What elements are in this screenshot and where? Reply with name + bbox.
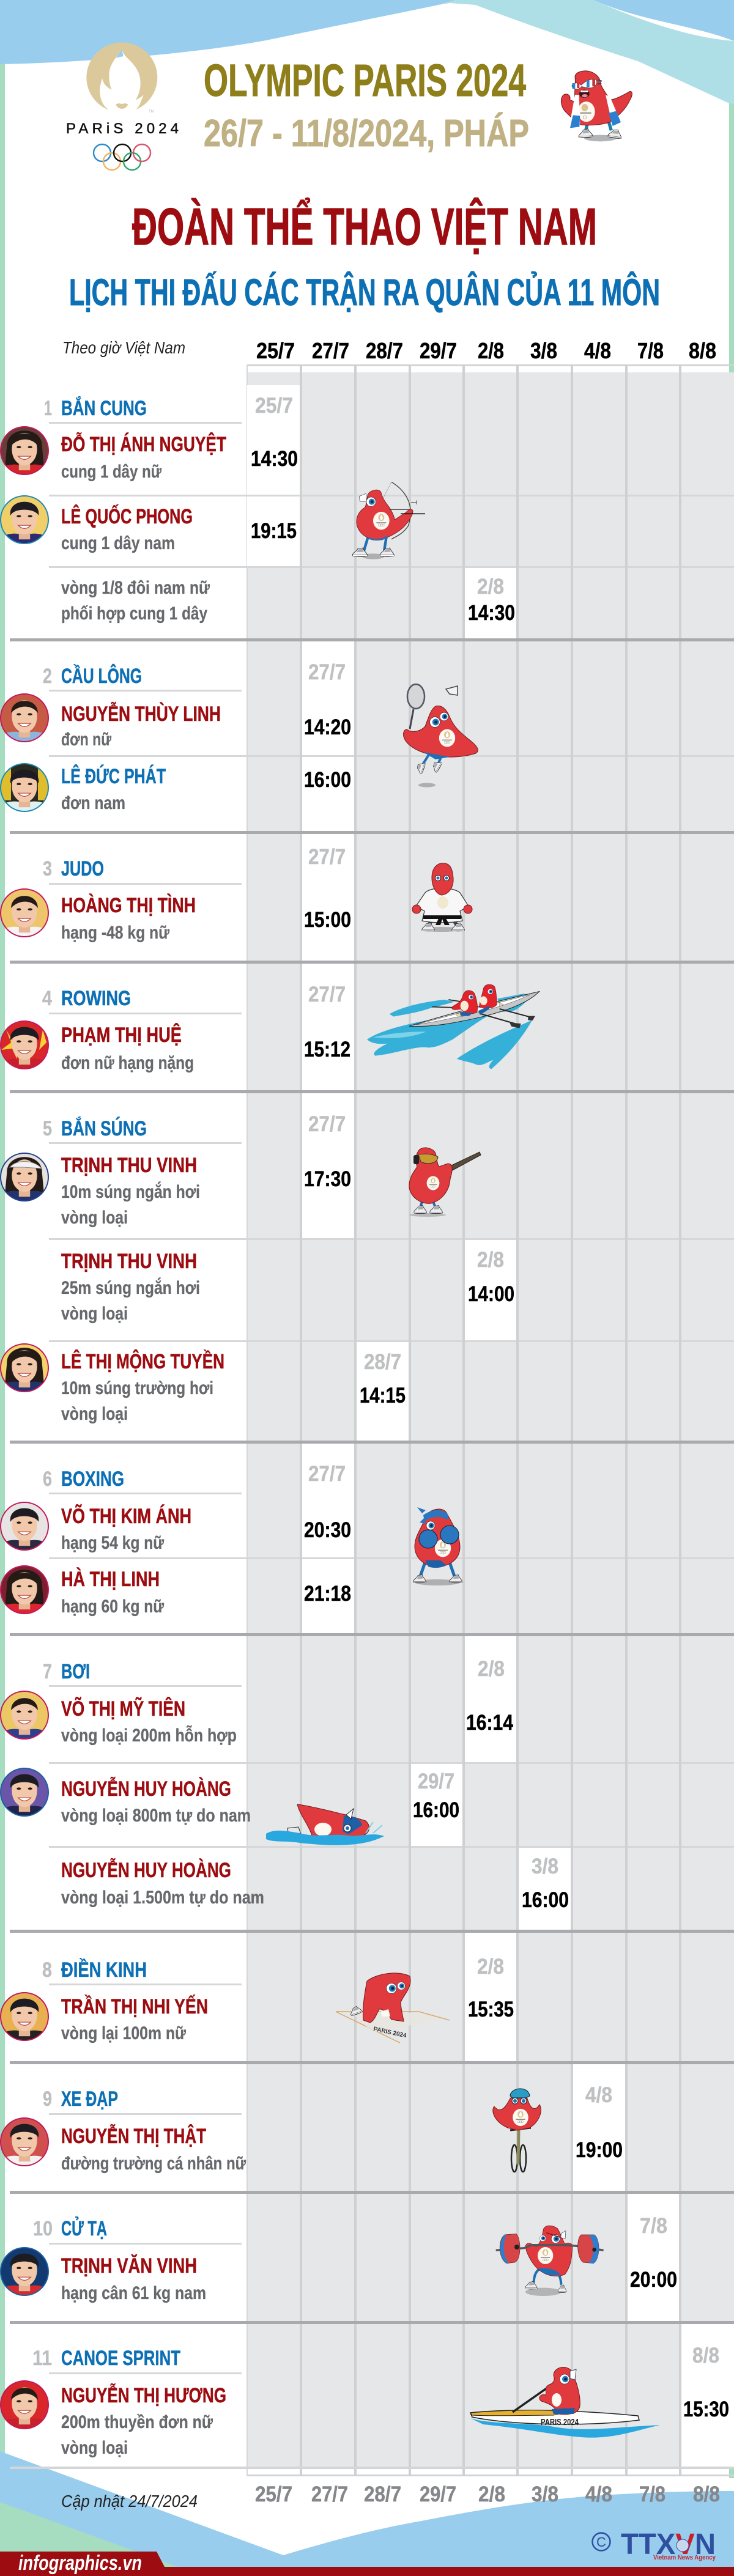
athlete name: TRỊNH VĂN VINH [61,2254,197,2278]
panel: 4 Rowing [0,983,350,1073]
time: 15:35 [468,1998,514,2021]
event: cung 1 dây nam [61,533,175,553]
athlete photo [0,2381,50,2430]
logo: TTXVN: TTXVN [621,2528,716,2561]
date header row [256,338,716,363]
sport heading [43,2087,118,2111]
time: 16:00 [522,1888,569,1912]
event: vòng loại [61,1404,128,1424]
event: vòng loại [61,1208,128,1228]
logo: TTXVN: C [596,2534,606,2550]
date footer row: 2/8 [478,2482,505,2506]
sport heading [43,1467,124,1491]
athlete photo [0,694,50,744]
time: 17:30 [304,1167,351,1191]
time: 21:18 [304,1582,351,1606]
athlete photo [0,427,50,476]
date footer row: 27/7 [311,2482,348,2506]
athlete photo [0,1021,50,1071]
icon: mascot with scarf [561,71,632,141]
icon: mascot canoe: PARIS 2024 [541,2417,579,2427]
date: 8/8 [692,2344,719,2367]
panel: 1 Bắn cung [0,394,515,625]
date header row: 28/7 [366,338,403,363]
event: đơn nam [61,793,125,813]
time: 14:30 [468,601,515,625]
icon: mascot badminton [404,684,478,788]
date header row: 2/8 [478,338,504,363]
sport heading: XE ĐẠP [61,2087,118,2111]
athlete name: ĐỖ THỊ ÁNH NGUYỆT [61,433,226,456]
date footer row: 8/8 [693,2482,720,2506]
event: 25m súng ngắn hơi [61,1277,200,1298]
event: đơn nữ hạng nặng [61,1053,194,1073]
date footer row: 4/8 [585,2482,612,2506]
icon: mascot judo [412,863,472,932]
date header row: 8/8 [689,338,716,363]
time: 20:00 [630,2268,677,2292]
date: 4/8 [585,2083,612,2107]
sport heading [42,1958,147,1982]
event: cung 1 dây nữ [61,462,161,482]
time: 16:14 [466,1711,513,1735]
time: 15:12 [304,1038,350,1061]
athlete photo [0,1502,50,1552]
sport heading: ROWING [61,987,131,1010]
heading: Olympic Paris 2024: OLYMPIC PARIS 2024 [204,55,526,106]
athlete photo [0,2118,50,2168]
athlete name: HÀ THỊ LINH [61,1568,160,1591]
date: 7/8 [640,2214,667,2238]
icon: mascot weightlifting [496,2226,604,2296]
panel: 6 Boxing [0,1462,351,1617]
panel: 10 Cử tạ [0,2214,677,2303]
time: 20:30 [304,1518,351,1542]
athlete photo [0,496,50,545]
panel: 11 Canoe sprint [0,2344,729,2458]
schedule grid [49,364,734,2476]
event: vòng loại [61,2438,128,2458]
event: vòng lại 100m nữ [61,2023,186,2043]
time: 14:30 [251,447,298,471]
section separators [10,638,734,2469]
event: 10m súng ngắn hơi [61,1181,200,1202]
time: 15:00 [304,908,351,932]
date: 3/8 [532,1854,558,1878]
event: vòng loại 200m hỗn hợp [61,1725,237,1746]
sport heading: 5 [43,1117,52,1140]
sport heading [33,2217,107,2240]
event: hạng 60 kg nữ [61,1596,164,1617]
athlete name: VÕ THỊ MỸ TIÊN [61,1697,185,1721]
footer tag: infographics.vn: infographics.vn [18,2552,142,2575]
time: 16:00 [304,768,351,792]
date footer row: 3/8 [532,2482,558,2506]
sport heading: 10 [33,2217,53,2240]
icon: mascot athletics: PARIS 2024 [373,2026,407,2039]
athlete name: LÊ THỊ MỘNG TUYỀN [61,1349,224,1373]
athlete name: TRẦN THỊ NHI YẾN [61,1995,208,2018]
logo: Paris 2024 emblem: TM [149,110,154,114]
heading: dates: 26/7 - 11/8/2024, PHÁP [204,113,529,155]
sport heading: BẮN SÚNG [61,1117,147,1140]
time: 19:15 [251,519,297,543]
athlete photo [0,2248,50,2297]
sport heading [43,1660,90,1683]
date header row: 29/7 [420,338,457,363]
time: 14:20 [304,715,351,739]
athlete photo [0,1993,50,2042]
icon: mascot archery [352,482,425,559]
time: 19:00 [576,2138,623,2162]
logo: Paris 2024 emblem [66,42,179,170]
athlete photo [0,1153,50,1203]
date: 27/7 [308,845,346,869]
date header row: 7/8 [637,338,664,363]
logo: Paris 2024 emblem: PARiS 2024 [66,120,179,137]
athlete name: NGUYỄN HUY HOÀNG [61,1859,231,1882]
date: 2/8 [477,1248,504,1272]
event: 200m thuyền đơn nữ [61,2412,213,2432]
sport heading: BẮN CUNG [61,397,147,420]
date header row: 25/7 [256,338,295,363]
event: hạng cân 61 kg nam [61,2283,206,2303]
athlete photo [0,1344,50,1393]
panel: 2 Cầu lông [0,660,351,813]
sport heading: CANOE SPRINT [61,2347,180,2370]
sport heading: BƠI [61,1660,90,1683]
sport heading: 11 [32,2347,52,2370]
date: 25/7 [255,394,293,418]
panel: 3 Judo [0,845,351,943]
sport heading: BOXING [61,1467,124,1491]
athlete name: HOÀNG THỊ TÌNH [61,894,196,917]
note: timezone: Theo giờ Việt Nam [62,338,185,357]
event: phối hợp cung 1 dây [61,603,207,624]
event: đơn nữ [61,729,111,750]
sport heading: 3 [43,857,52,880]
date: 2/8 [477,1955,504,1979]
sport heading: 6 [43,1467,52,1491]
athlete name: TRỊNH THU VINH [61,1154,197,1177]
date: 28/7 [364,1350,401,1374]
date: 2/8 [478,1657,505,1681]
date: 27/7 [308,1112,346,1136]
sport heading: JUDO [61,857,104,880]
icon: mascot boxing [413,1507,462,1585]
panel: 7 Bơi [0,1657,569,1912]
white time cells [247,385,734,2467]
logo: TTXVN: Vietnam News Agency [653,2554,716,2561]
athlete photo [0,1768,50,1818]
date: 27/7 [308,1462,346,1486]
athlete name: VÕ THỊ KIM ÁNH [61,1505,191,1528]
icon: mascot swimming [266,1804,384,1845]
event: vòng loại [61,1304,128,1324]
panel: 9 Xe đạp [0,2083,623,2174]
athlete name: NGUYỄN THỊ HƯƠNG [61,2384,226,2407]
event: đường trường cá nhân nữ [61,2153,246,2174]
sport heading: 1 [44,397,52,420]
sport heading [32,2347,180,2370]
date header row: 27/7 [312,338,349,363]
sport heading [43,664,142,688]
athlete name: PHẠM THỊ HUỆ [61,1024,182,1047]
sport heading: 7 [43,1660,52,1683]
sport heading [42,987,131,1010]
event: 10m súng trường hơi [61,1378,213,1398]
athlete name: LÊ ĐỨC PHÁT [61,765,166,788]
date footer row: 25/7 [255,2482,292,2506]
note: update date: Cập nhật 24/7/2024 [61,2492,198,2511]
sport heading: 9 [43,2087,52,2111]
icon: mascot athletics [336,1973,450,2043]
date: 27/7 [308,983,346,1006]
sport heading [43,1117,147,1140]
time: 16:00 [413,1798,459,1822]
sport heading [44,397,147,420]
time: 14:15 [360,1384,406,1408]
date footer row: 29/7 [420,2482,456,2506]
icon: mascot cycling [493,2089,541,2172]
date: 29/7 [418,1770,454,1793]
athlete name: NGUYỄN THÙY LINH [61,703,221,726]
event: hạng -48 kg nữ [61,923,169,943]
event: vòng 1/8 đôi nam nữ [61,578,210,598]
date: 27/7 [308,660,346,684]
sport heading: 8 [42,1958,52,1982]
athlete name: LÊ QUỐC PHONG [61,504,193,528]
panel: 5 Bắn súng [0,1112,514,1424]
panel: 8 Điền kinh [0,1955,514,2043]
date: 2/8 [477,575,504,599]
event: vòng loại 1.500m tự do nam [61,1888,264,1908]
athlete photo [0,1566,50,1615]
event: hạng 54 kg nữ [61,1533,164,1553]
date footer row: 28/7 [364,2482,401,2506]
date footer row [255,2482,720,2506]
sport heading: ĐIỀN KINH [61,1958,147,1982]
icon: mascots rowing [367,984,539,1069]
date header row: 4/8 [584,338,611,363]
athlete photo [0,764,50,813]
sport heading: 2 [43,665,52,688]
athlete name: NGUYỄN HUY HOÀNG [61,1777,231,1801]
sport heading: 4 [42,987,52,1010]
sport heading: CẦU LÔNG [61,664,142,688]
athlete name: TRỊNH THU VINH [61,1250,197,1273]
icon: mascot canoe [470,2367,660,2438]
time: 14:00 [468,1282,514,1306]
date header row: 3/8 [530,338,557,363]
athlete photo [0,889,50,939]
sport heading [43,857,104,880]
athlete name: NGUYỄN THỊ THẬT [61,2125,206,2148]
sport heading: CỬ TẠ [61,2217,107,2240]
date footer row: 7/8 [639,2482,665,2506]
athlete photo [0,1691,50,1741]
grid lines [300,364,681,2476]
icon: mascot shooting [409,1148,481,1217]
event: vòng loại 800m tự do nam [61,1806,251,1826]
